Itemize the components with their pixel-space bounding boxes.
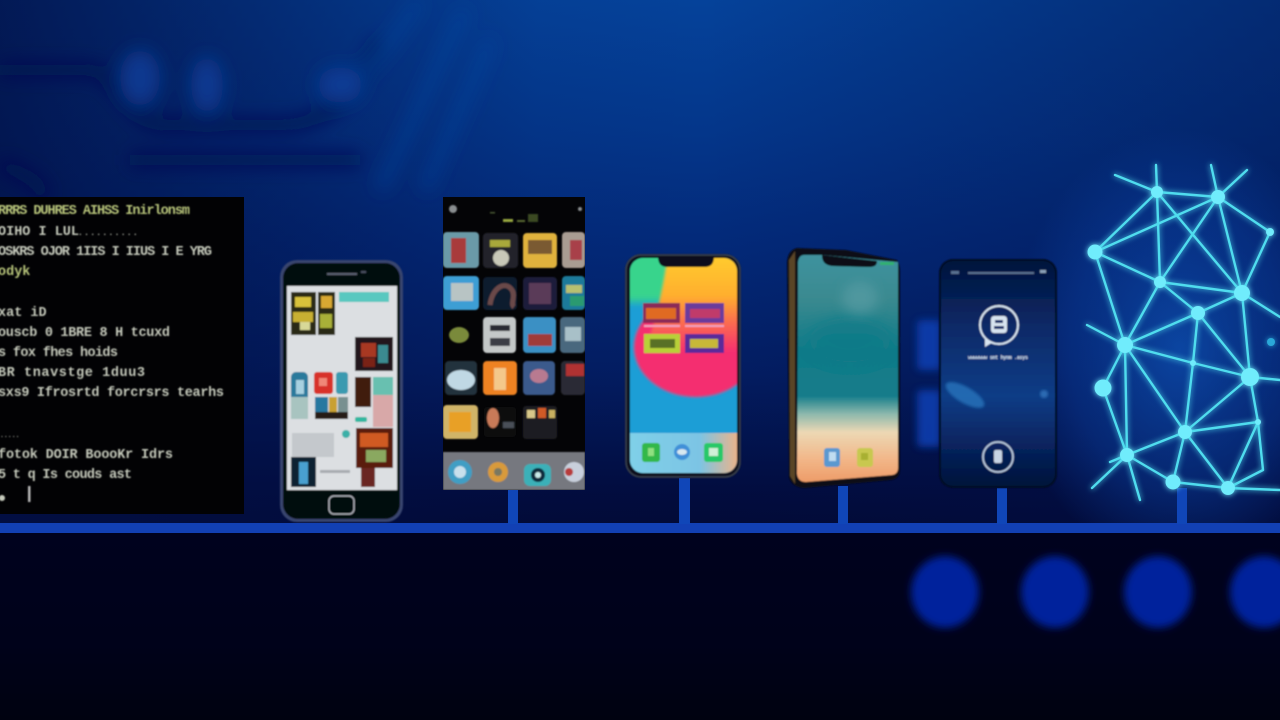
phone 2 icon row 1 bbox=[443, 232, 585, 268]
faint circuit pattern bbox=[0, 0, 490, 197]
phone 2 dock bbox=[443, 452, 585, 490]
phone 2 status row bbox=[449, 205, 582, 222]
terminal text: ..... bbox=[0, 432, 20, 439]
panel: terminal bbox=[0, 197, 244, 514]
terminal text: OIHO I LUL bbox=[0, 225, 79, 240]
terminal text: s fox fhes hoids bbox=[0, 346, 118, 361]
terminal text: 5 t q Is couds ast bbox=[0, 468, 132, 483]
phone 4: beach wallpaper bbox=[787, 248, 900, 488]
neural network graphic bbox=[1087, 165, 1280, 500]
timeline bar bbox=[0, 523, 1280, 533]
phone 3: colourful wallpaper bbox=[624, 253, 742, 479]
terminal text: BR tnavstge 1duu3 bbox=[0, 366, 145, 381]
phone 3 notch bbox=[658, 256, 714, 267]
terminal text: fotok DOIR BoooKr Idrs bbox=[0, 448, 173, 463]
terminal text: ouscb 0 1BRE 8 H tcuxd bbox=[0, 326, 170, 341]
terminal text: sxs9 Ifrosrtd forcrsrs tearhs bbox=[0, 386, 224, 401]
floor glowing circles bbox=[911, 556, 1280, 628]
terminal text bbox=[0, 204, 224, 502]
terminal text: .......... bbox=[78, 229, 139, 238]
phone 5 lower button bbox=[983, 442, 1013, 472]
phone 2 icon row 2 bbox=[443, 276, 585, 310]
timeline stems bbox=[508, 478, 1187, 524]
network nodes bbox=[1088, 186, 1275, 495]
phone 1 screen bbox=[287, 286, 397, 490]
terminal text: RRRS DUHRES AIHSS Inirlonsm bbox=[0, 204, 190, 219]
phone 2 icon row 5 bbox=[443, 405, 557, 439]
phone 2 icon row 4 bbox=[445, 361, 585, 395]
phone 5 status bar bbox=[951, 270, 1046, 274]
phone 4 wallpaper bbox=[797, 255, 898, 482]
phone 3 wallpaper bbox=[628, 256, 738, 474]
blue glow tiles behind phones bbox=[917, 320, 941, 447]
phone 3 widgets bbox=[643, 303, 724, 353]
phone 4 notch bbox=[822, 255, 877, 267]
phone 5 caption: wwwwwww smt hymm .asys bbox=[968, 355, 1028, 361]
terminal text: OSKRS OJOR 1IIS I IIUS I E YRG bbox=[0, 245, 212, 260]
phone 5 chat logo bbox=[980, 306, 1018, 347]
floor bbox=[0, 530, 1280, 720]
phone 1: early smartphone bbox=[280, 260, 403, 522]
background bbox=[0, 0, 1280, 570]
phone 5: modern dark screen bbox=[939, 259, 1057, 488]
phone 4 icons bbox=[824, 448, 873, 467]
phone 2 icon row 3 bbox=[449, 317, 585, 353]
phone 2: app grid screen bbox=[443, 197, 585, 490]
phone 3 dock icons bbox=[642, 443, 723, 462]
